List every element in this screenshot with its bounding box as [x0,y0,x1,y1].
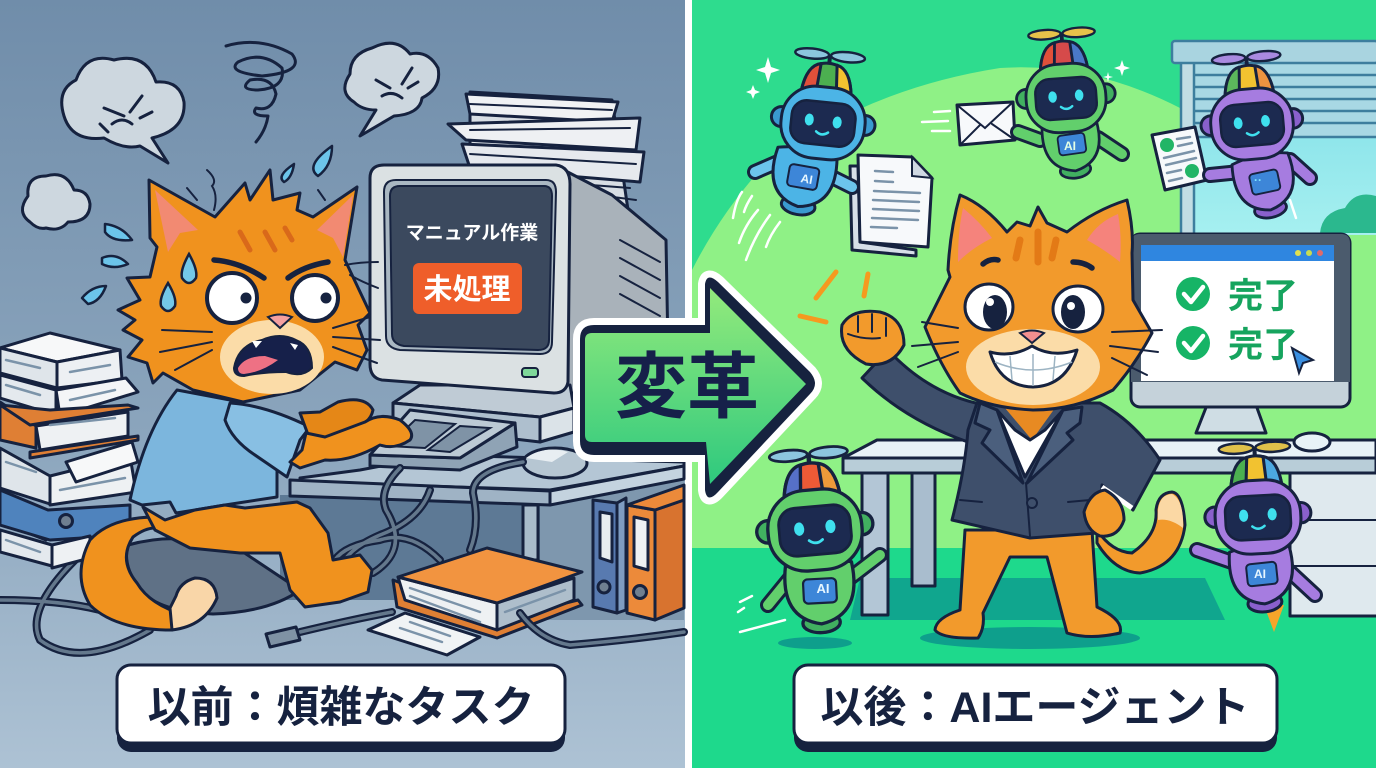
status text 2: 完了 [1228,326,1298,365]
robot: green lower: AI [816,581,830,596]
book stack left [0,333,138,568]
arms [768,578,790,605]
icon: small cloud [22,175,90,229]
rocket flame [1264,605,1284,632]
retro computer [370,165,668,442]
check 2 [1176,326,1210,360]
shirt [997,410,1063,477]
arms [1018,132,1040,140]
inner ears [958,208,1121,262]
robot: purple checklist carrier [1195,48,1310,224]
brows [983,260,1092,268]
robot: purple lower [1197,440,1315,632]
haunch [143,502,372,607]
desk mouse [1294,433,1330,451]
nose [1020,330,1044,343]
muzzle [220,320,324,394]
open book [393,548,582,638]
icon: sweat drops [82,146,332,304]
hand on hip [1084,490,1124,536]
head [925,195,1152,410]
whiskers [912,322,1162,375]
panel: after background [692,0,1376,768]
robot: blue: AI [800,171,814,187]
arms [755,162,778,172]
status badge [413,263,522,314]
mouse [523,448,587,478]
eyes [965,284,1013,330]
character: stressed cat [81,170,412,630]
shirt [130,390,300,513]
desk right [843,440,1376,616]
status text 1: 完了 [1228,277,1298,316]
binders [593,485,684,620]
tail [1097,492,1185,573]
fist [842,311,904,365]
monitor side [540,168,668,395]
suit [952,403,1160,538]
muzzle [966,329,1100,405]
robot: blue [755,45,882,220]
spark lines [800,272,868,322]
monitor base [393,385,574,417]
legs [935,530,1121,638]
label: after [794,665,1277,752]
chest screen: ·· [1254,173,1262,187]
panel: before background [0,0,685,768]
keyboard [370,410,517,470]
robot: green envelope carrier: AI [1064,139,1076,153]
arms [1210,172,1240,175]
lapels [975,403,1082,483]
arms [1197,550,1232,562]
cuff [1102,487,1132,508]
motion lines [733,111,1296,632]
paper stack [448,92,665,260]
monitor right [1131,234,1350,433]
floating document [850,155,932,256]
robot: purple lower: AI [1254,567,1266,581]
label: after: 以後：AIエージェント [820,684,1250,732]
tail [81,517,185,630]
inner ears [155,190,198,252]
plug [266,627,300,647]
window right [1172,41,1376,235]
rear arm [300,400,373,440]
eyes [207,273,257,323]
loose paper [368,613,480,655]
angry brows [214,260,328,278]
stripes [1016,232,1056,262]
neck [1005,408,1055,440]
checklist document [1152,127,1207,190]
icon: dizzy spiral [226,42,295,142]
cable over book [520,613,684,645]
sleeve [225,403,310,477]
arrow: transformation [580,277,815,498]
icon: angry cloud left [62,58,184,163]
foot shadow [920,627,1140,649]
robot: green lower [750,443,880,649]
whiskers [160,317,380,370]
label: before [117,665,565,752]
status badge: 未処理 [423,273,511,306]
raised arm [862,350,985,442]
arrow label: 変革 [615,348,759,428]
shadow [778,637,852,649]
sparkles [746,57,1130,99]
label: before: 以前：煩雑なタスク [148,684,534,732]
monitor front [370,165,570,393]
head [118,170,370,402]
grin [990,346,1077,387]
desk left [290,455,684,560]
divider [685,0,692,768]
front arm [290,416,412,468]
rock seat [126,539,300,614]
check 1 [1176,277,1210,311]
sweat on face [161,254,196,311]
icon: angry cloud right [345,43,439,136]
flyaway hairs [187,170,378,288]
robot: green envelope carrier [1012,25,1122,182]
tail tip [170,578,217,630]
envelope [957,102,1015,145]
nose and mouth [268,314,292,328]
forehead fur marks [240,228,292,250]
screen [390,186,552,350]
screen text: マニュアル作業 [406,222,538,244]
character: happy cat in suit [800,195,1185,638]
cursor [1292,348,1313,373]
cables [0,462,523,653]
